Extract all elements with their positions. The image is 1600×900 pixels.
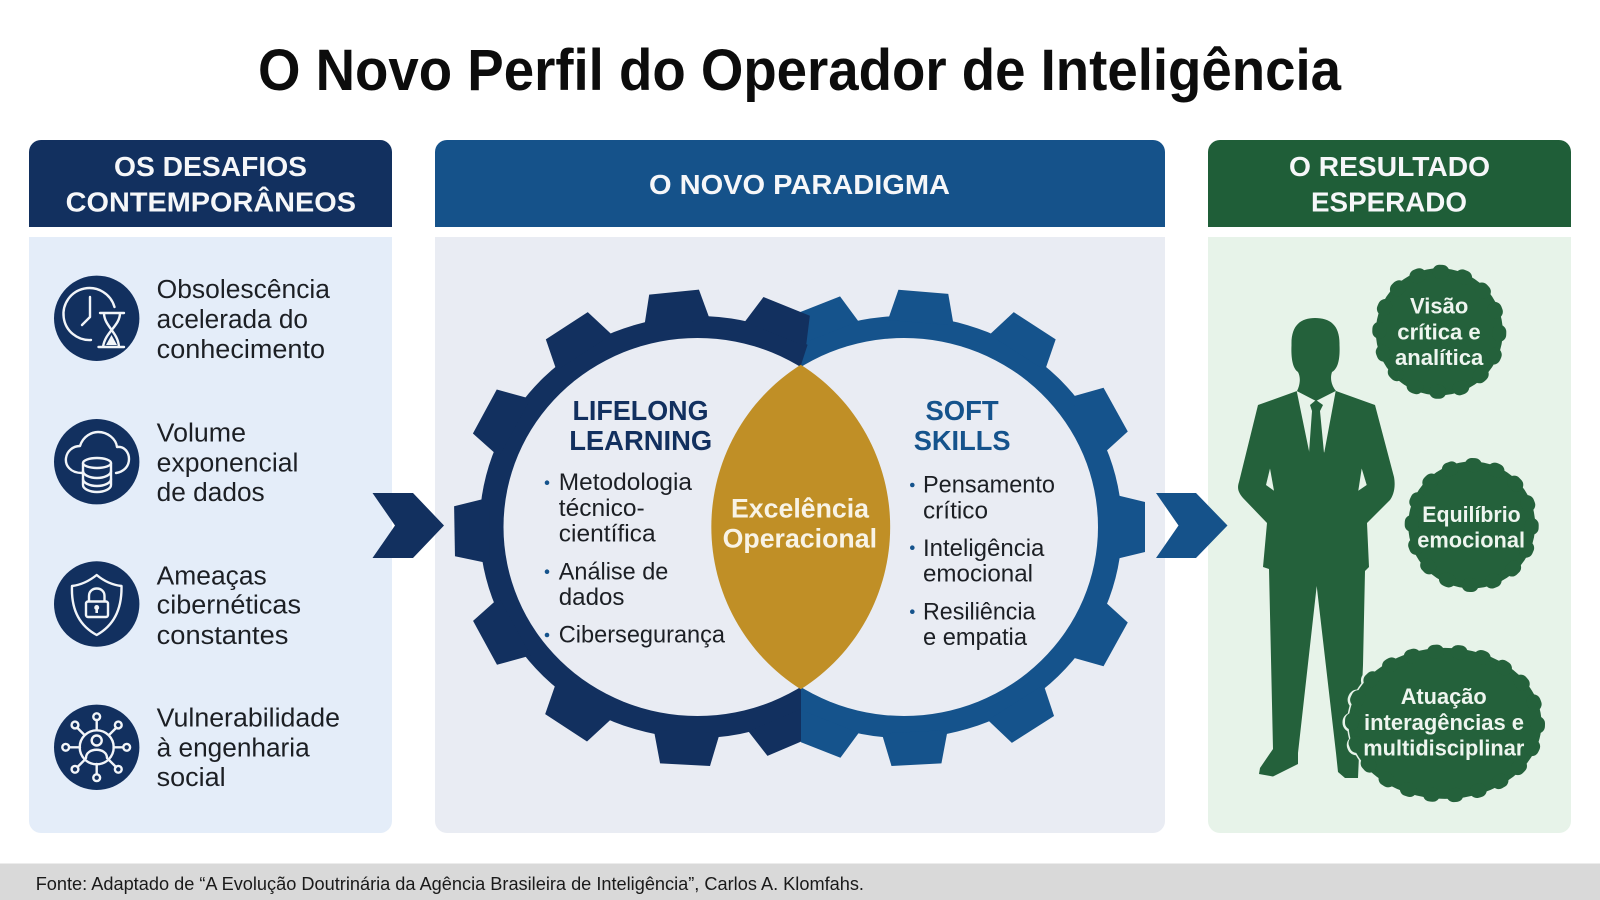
venn overlap: excelência operacional: Operacional: [723, 523, 877, 553]
heading: soft skills: SKILLS: [914, 425, 1010, 456]
arrow: paradigma to resultado: [1156, 493, 1228, 558]
list: soft skills: [910, 472, 1055, 651]
badge: atuação interagências e multidisciplinar: [1347, 646, 1543, 800]
badge: visão crítica e analítica: crítica e: [1397, 320, 1481, 344]
panel header: desafios: OS DESAFIOS: [114, 151, 307, 182]
badge: atuação interagências e multidisciplinar: interagências e: [1364, 710, 1524, 735]
badge: equilíbrio emocional: emocional: [1417, 527, 1525, 552]
title: O Novo Perfil do Operador de Inteligência: [258, 38, 1342, 103]
text: ameaças: constantes: [157, 622, 288, 650]
list: soft skills: Inteligência: [923, 535, 1045, 562]
text: vulnerabilidade: [157, 705, 340, 792]
text: volume: Volume: [157, 420, 246, 448]
heading: soft skills: [914, 395, 1010, 456]
text: ameaças: Ameaças: [157, 562, 267, 590]
arrow: desafios to paradigma: [372, 493, 444, 558]
list: lifelong learning: Cibersegurança: [559, 621, 726, 648]
icon: cloud database: [54, 419, 139, 504]
panel: o resultado esperado: [1208, 140, 1571, 833]
list: soft skills: crítico: [923, 497, 988, 524]
list: lifelong learning: Metodologia: [559, 469, 693, 496]
badge: equilíbrio emocional: [1408, 462, 1535, 588]
badge: visão crítica e analítica: Visão: [1410, 294, 1468, 318]
panel header: paradigma: [435, 140, 1165, 227]
heading: lifelong learning: [569, 395, 712, 456]
list: lifelong learning: [545, 469, 726, 648]
panel header: resultado: ESPERADO: [1311, 187, 1467, 218]
list: lifelong learning: dados: [559, 584, 624, 611]
badge: visão crítica e analítica: analítica: [1395, 345, 1484, 370]
panel body: desafios: [29, 237, 392, 833]
footer: source: [0, 864, 1600, 900]
footer: source: Fonte: Adaptado de “A Evolução Doutrinária da Agência Brasileira de Inteligência”, Carlos A. Klomfahs.: [36, 873, 864, 894]
text: volume: exponencial: [157, 450, 298, 478]
list: soft skills: e empatia: [923, 624, 1028, 651]
gear interior: right circle: [710, 338, 1098, 716]
heading: lifelong learning: LEARNING: [569, 425, 712, 456]
venn overlap: excelência operacional: [711, 365, 890, 689]
icon: social network person: [54, 705, 139, 790]
heading: soft skills: SOFT: [926, 395, 999, 426]
icon: shield and lock: [54, 561, 139, 647]
text: obsolescência: acelerada do: [157, 306, 308, 334]
text: ameaças: cibernéticas: [157, 592, 301, 620]
panel: os desafios contemporâneos: [29, 140, 392, 833]
text: volume: [157, 420, 298, 507]
text: obsolescência: Obsolescência: [157, 276, 331, 304]
panel header: resultado: [1208, 140, 1571, 227]
list: lifelong learning: Análise de: [559, 558, 668, 585]
badge: atuação interagências e multidisciplinar: multidisciplinar: [1363, 736, 1525, 760]
badge: equilíbrio emocional: Equilíbrio: [1422, 502, 1521, 527]
text: vulnerabilidade: Vulnerabilidade: [157, 705, 340, 733]
panel header: paradigma: O NOVO PARADIGMA: [649, 169, 950, 200]
panel header: desafios: CONTEMPORÂNEOS: [66, 187, 356, 218]
badge: visão crítica e analítica: [1376, 268, 1503, 395]
text: volume: de dados: [157, 479, 265, 507]
text: vulnerabilidade: à engenharia: [157, 735, 311, 763]
gear interior: left circle: [504, 338, 892, 716]
text: obsolescência: conhecimento: [157, 336, 325, 364]
text: obsolescência: [157, 276, 331, 364]
heading: lifelong learning: LIFELONG: [572, 395, 708, 426]
list: soft skills: emocional: [923, 561, 1033, 588]
list: soft skills: Pensamento: [923, 472, 1055, 499]
panel header: desafios: [29, 140, 392, 227]
panel header: resultado: O RESULTADO: [1289, 151, 1490, 182]
badge: atuação interagências e multidisciplinar: Atuação: [1401, 684, 1487, 709]
panel body: resultado: [1208, 237, 1571, 833]
list: soft skills: Resiliência: [923, 598, 1036, 625]
gear: soft skills: [800, 290, 1145, 766]
icon: clock and hourglass: [54, 276, 139, 361]
list: lifelong learning: científica: [559, 521, 656, 548]
gear: lifelong learning: [454, 290, 810, 766]
venn overlap: excelência operacional: Excelência: [731, 493, 870, 523]
panel body: paradigma: [435, 237, 1165, 833]
text: ameaças: [157, 562, 301, 650]
list: lifelong learning: técnico-: [559, 495, 645, 522]
panel: o novo paradigma: [435, 140, 1165, 833]
text: vulnerabilidade: social: [157, 764, 226, 792]
silhouette: professional in suit: [1238, 318, 1395, 778]
